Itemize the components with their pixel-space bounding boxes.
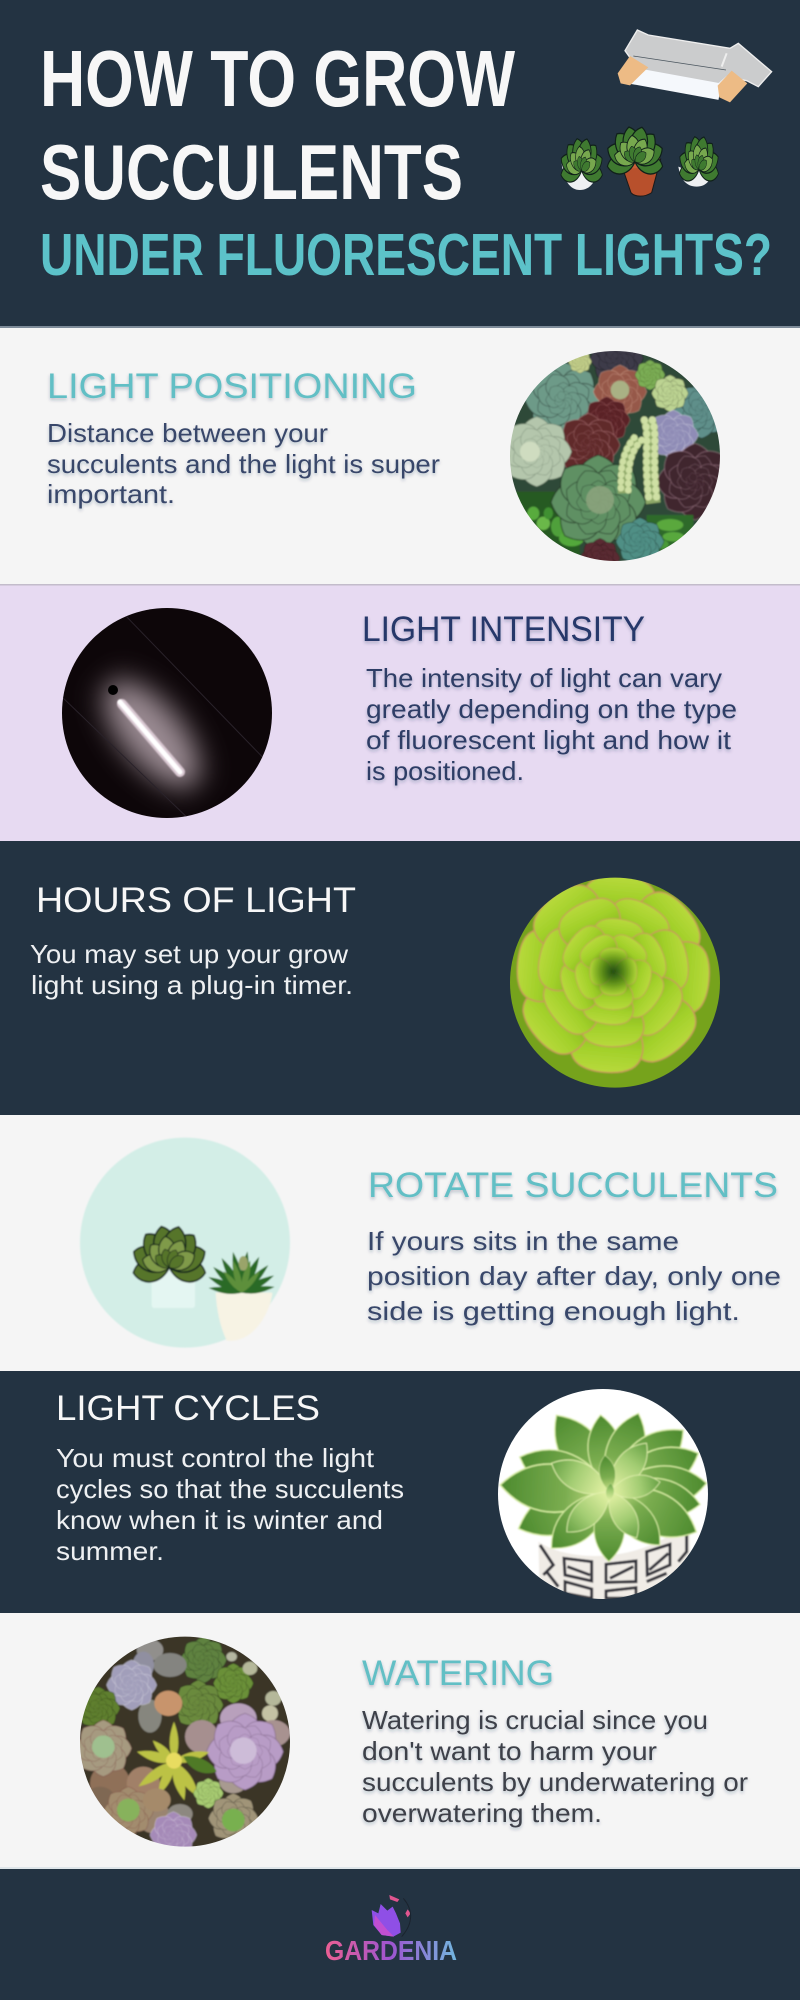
panel: footer — [0, 1867, 800, 2000]
text: light intensity body: greatly depending on the type — [366, 694, 737, 724]
text: light cycles body: cycles so that the succulents — [56, 1474, 404, 1504]
text: rotate succulents body — [367, 1226, 781, 1326]
text: light cycles body — [56, 1443, 404, 1566]
text: rotate succulents body: side is getting enough light. — [367, 1296, 740, 1326]
panel: rotate succulents — [0, 1115, 800, 1372]
photo: pastel succulent arrangement — [80, 1636, 290, 1847]
heading: hours of light: HOURS OF LIGHT — [36, 881, 356, 920]
photo: echeveria in patterned pot — [498, 1389, 708, 1599]
text: watering body: overwatering them. — [362, 1798, 602, 1828]
panel: light positioning — [0, 328, 800, 585]
heading: watering: WATERING — [362, 1654, 554, 1693]
text: light positioning body: important. — [47, 479, 175, 509]
text: rotate succulents body: position day after day, only one — [367, 1261, 781, 1291]
icon: fluorescent light fixture — [618, 30, 772, 102]
text: light positioning body: Distance between your — [47, 418, 328, 448]
text: light intensity body: of fluorescent light and how it — [366, 725, 732, 755]
panel: light cycles — [0, 1371, 800, 1613]
title — [40, 34, 772, 288]
text: light cycles body: know when it is winter and — [56, 1505, 383, 1535]
heading: light intensity: LIGHT INTENSITY — [362, 610, 645, 649]
text: hours of light body: You may set up your grow — [30, 939, 348, 969]
heading: light positioning: LIGHT POSITIONING — [47, 367, 417, 406]
photo: two potted succulents on mint background — [80, 1138, 290, 1348]
text: hours of light body: light using a plug-in timer. — [31, 970, 353, 1000]
text: light positioning body: succulents and the light is super — [47, 449, 440, 479]
heading: rotate succulents: ROTATE SUCCULENTS — [368, 1166, 778, 1205]
icon: flower mark — [372, 1895, 411, 1937]
text: hours of light body — [30, 939, 353, 1000]
text: watering body: succulents by underwatering or — [362, 1767, 748, 1797]
text: watering body: don't want to harm your — [362, 1736, 657, 1766]
title: HOW TO GROW — [40, 34, 515, 123]
text: rotate succulents body: If yours sits in the same — [367, 1226, 679, 1256]
text: light intensity body: is positioned. — [366, 756, 524, 786]
text: watering body — [362, 1705, 748, 1828]
text: light intensity body — [366, 663, 737, 786]
panel: header — [0, 0, 800, 328]
text: light intensity body: The intensity of light can vary — [366, 663, 722, 693]
panel: light intensity — [0, 584, 800, 842]
icon: three potted succulents — [559, 125, 720, 196]
heading: light cycles: LIGHT CYCLES — [56, 1389, 320, 1428]
text: light cycles body: summer. — [56, 1536, 164, 1566]
panel: hours of light — [0, 841, 800, 1115]
wordmark: GARDENIA — [325, 1935, 457, 1966]
photo: green aeonium rosette — [510, 878, 720, 1088]
text: light cycles body: You must control the light — [56, 1443, 375, 1473]
logo: Gardenia — [325, 1895, 457, 1966]
photo: mixed succulent arrangement — [510, 351, 720, 561]
photo: glowing fluorescent tube — [60, 606, 275, 825]
panel: watering — [0, 1613, 800, 1869]
text: light positioning body — [47, 418, 440, 509]
text: watering body: Watering is crucial since you — [362, 1705, 708, 1735]
title: SUCCULENTS — [40, 128, 463, 216]
